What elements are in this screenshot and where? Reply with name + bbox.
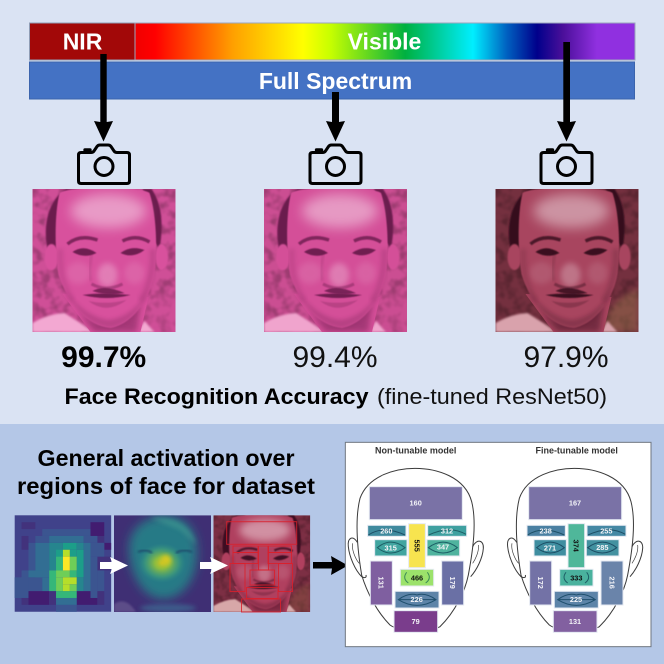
icon: camera visible <box>541 145 592 184</box>
region: right eye: 285 <box>596 543 608 552</box>
region: right brow: 255 <box>600 526 612 535</box>
region: right eye <box>586 540 619 556</box>
region: left eye: 315 <box>385 543 397 552</box>
region: forehead <box>529 487 622 520</box>
region: left eye <box>534 540 566 556</box>
region: mouth <box>395 591 439 608</box>
head outline <box>508 468 643 631</box>
region: mouth: 226 <box>411 595 423 604</box>
region: nose <box>400 569 434 586</box>
region: right cheek: 179 <box>448 577 457 589</box>
caption: face recognition accuracy: (fine-tuned ResNet50) <box>377 384 607 409</box>
heading: non-tunable model: Non-tunable model <box>375 445 456 455</box>
accuracy NIR: 99.7% <box>61 341 146 374</box>
arrow: full spectrum to camera <box>326 92 345 142</box>
region: left eye <box>375 540 407 556</box>
background: top section <box>0 0 664 424</box>
photo: face with region boxes <box>214 514 310 612</box>
region boxes <box>227 522 297 612</box>
heatmap <box>15 515 111 612</box>
photo: visible face <box>496 188 638 332</box>
heading: general activation: General activation over <box>38 445 295 471</box>
region: nose bridge: 374 <box>572 540 581 553</box>
region: forehead: 167 <box>569 499 581 508</box>
region: mouth <box>554 591 598 608</box>
full spectrum band: Full Spectrum <box>259 68 412 94</box>
caption: face recognition accuracy: Face Recognition Accuracy <box>64 384 369 409</box>
region: right brow: 312 <box>441 526 453 535</box>
spectrum bars <box>30 23 635 99</box>
background: bottom section <box>0 424 664 664</box>
region: nose <box>560 569 593 586</box>
photo: full spectrum face <box>264 188 407 332</box>
region: left brow <box>527 525 565 536</box>
arrow: NIR to camera <box>94 54 113 142</box>
head outline <box>348 468 483 631</box>
region: right brow <box>428 525 467 536</box>
arrow: regions to face maps <box>313 556 348 575</box>
region: left eye: 271 <box>544 543 556 552</box>
icon: camera full spectrum <box>310 145 361 184</box>
heading: general activation: regions of face for dataset <box>17 473 315 499</box>
region: chin: 79 <box>412 617 420 626</box>
region: left cheek: 131 <box>377 577 386 589</box>
caption: face recognition accuracy <box>64 384 607 409</box>
region: right eye: 347 <box>437 543 449 552</box>
region: left cheek <box>370 561 392 605</box>
NIR band <box>30 23 135 60</box>
region: nose bridge: 555 <box>412 540 421 552</box>
region: forehead <box>369 487 462 520</box>
heading: fine-tunable model: Fine-tunable model <box>535 445 618 455</box>
region: mouth: 225 <box>570 595 582 604</box>
full spectrum band <box>30 62 634 99</box>
region: chin: 131 <box>569 617 581 626</box>
region: nose bridge <box>568 524 585 568</box>
region: left cheek: 172 <box>536 577 545 589</box>
region: left cheek <box>530 561 552 605</box>
panel: face region maps <box>345 442 651 647</box>
region: forehead: 160 <box>410 499 422 508</box>
face map: fine-tunable <box>508 468 643 632</box>
heading: general activation <box>17 445 315 499</box>
region: chin <box>394 611 438 632</box>
arrow: heatmap to overlay <box>100 557 128 574</box>
visible band: Visible <box>348 28 421 54</box>
region: right cheek <box>601 561 623 605</box>
arrow: visible to camera <box>557 42 576 142</box>
accuracy visible: 97.9% <box>523 341 609 374</box>
region: right cheek: 216 <box>607 577 616 589</box>
face map: non-tunable <box>348 468 483 632</box>
region: nose: 466 <box>411 573 423 582</box>
NIR band: NIR <box>63 28 103 54</box>
region: nose: 333 <box>570 573 582 582</box>
visible band <box>135 23 635 60</box>
region: chin <box>553 611 597 632</box>
icon: camera NIR <box>78 145 130 184</box>
accuracy full spectrum: 99.4% <box>292 341 378 374</box>
region: right brow <box>587 525 626 536</box>
photo: NIR face <box>32 188 176 332</box>
region: left brow <box>368 525 406 536</box>
region: left brow: 260 <box>380 526 392 535</box>
face photo <box>214 514 310 612</box>
region: right cheek <box>442 561 464 605</box>
region: nose bridge <box>409 524 425 568</box>
region: left brow: 238 <box>540 526 552 535</box>
activation overlay on face <box>114 515 211 612</box>
arrow: overlay to regions <box>200 557 228 574</box>
region: right eye <box>427 540 460 556</box>
